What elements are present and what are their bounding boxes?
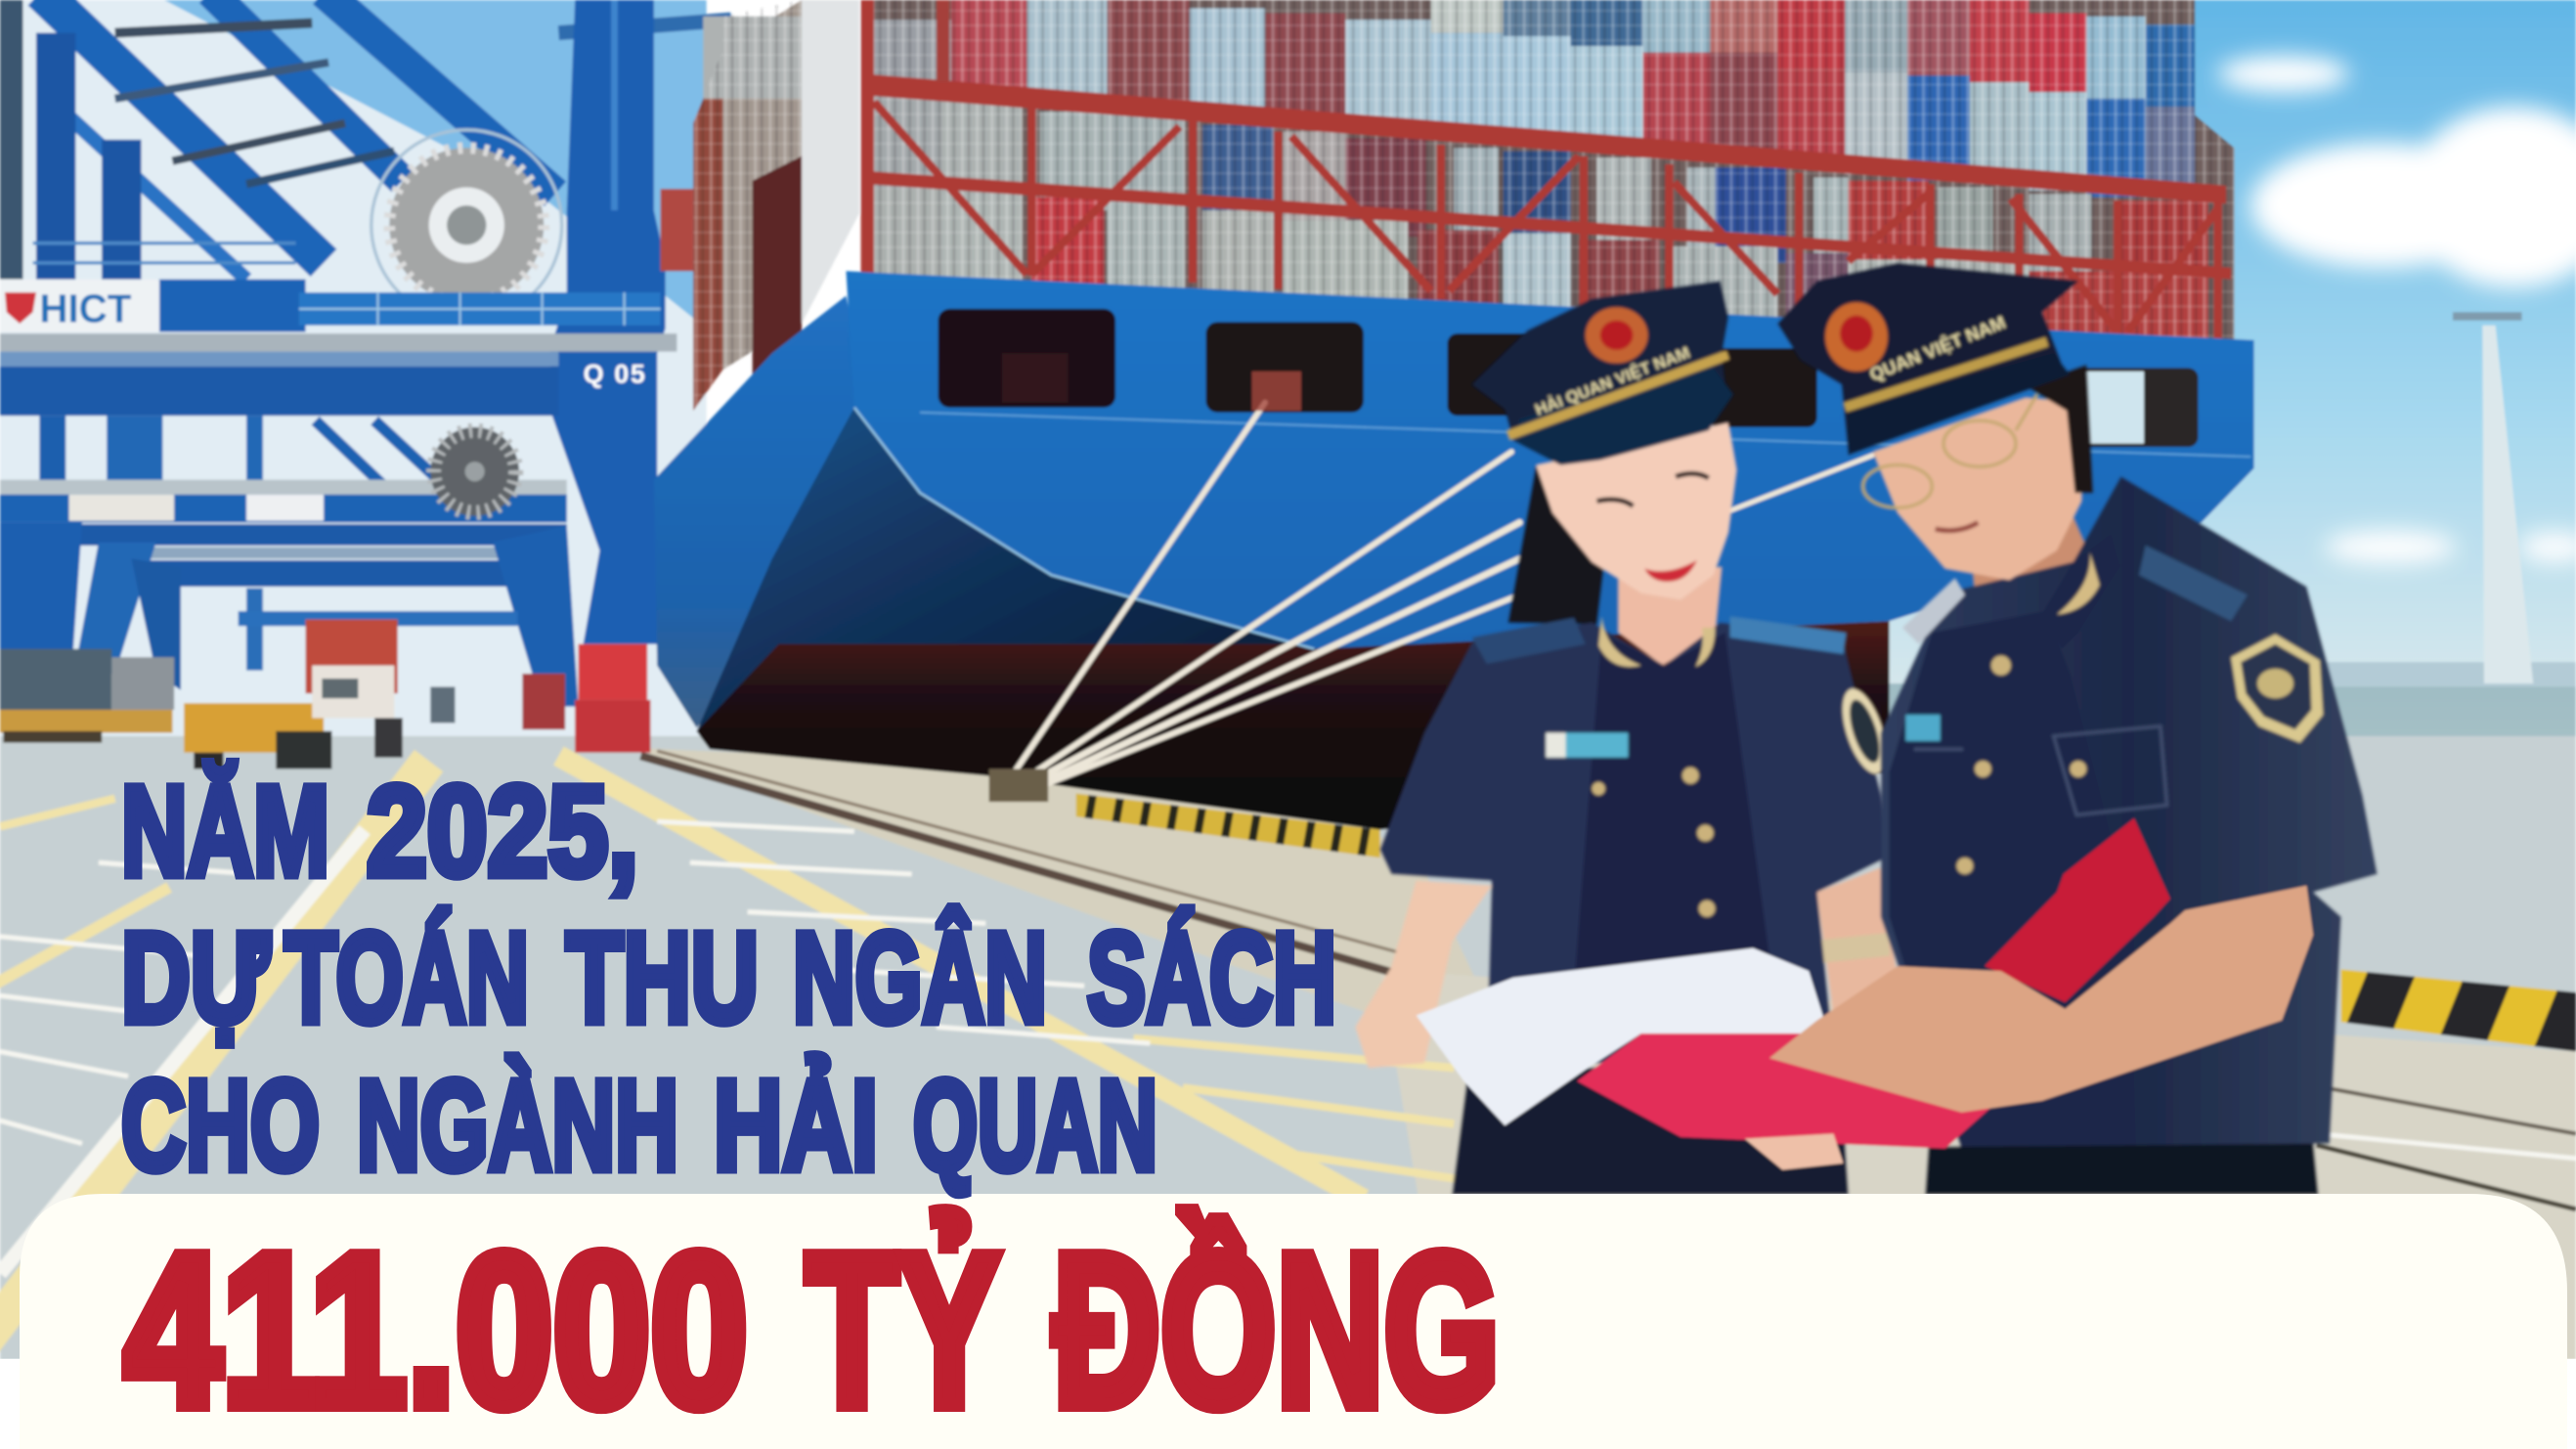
collar badge	[2057, 552, 2100, 615]
eyes and lips	[1596, 473, 1709, 582]
hair	[1508, 465, 1607, 625]
left sky behind cranes	[0, 0, 707, 748]
title line 2: DỰ	[121, 905, 270, 1049]
yellow and black quay bumper, far	[1076, 794, 1380, 857]
ship hull, red and black waterline	[697, 621, 1890, 830]
sleeve emblem	[1834, 683, 1896, 779]
main container stacks on deck	[861, 0, 2234, 353]
lower tier containers	[874, 189, 2208, 353]
ship hull, dark blue curved band	[697, 408, 1314, 731]
red steel lashing frame	[861, 0, 2231, 348]
title line 3: QUAN	[913, 1053, 1157, 1197]
crane cross beam	[0, 367, 558, 416]
main crane leg	[550, 0, 666, 644]
mooring ropes and bollard	[989, 372, 1873, 802]
cable reel, upper	[371, 130, 562, 321]
name tag and buttons	[1905, 715, 1941, 741]
neck	[1972, 509, 2095, 649]
red straddle machine	[522, 644, 650, 753]
crane platform with HICT sign: HICT	[39, 285, 132, 330]
top tier containers	[874, 0, 2195, 198]
ground and road markings	[0, 736, 2576, 1364]
panel: cream headline band	[20, 1194, 2567, 1449]
cap	[1777, 263, 2078, 452]
ship side container stacks	[661, 0, 859, 411]
cap badge	[1586, 307, 1648, 363]
skirt	[1453, 1068, 1849, 1195]
right forearm	[1817, 867, 1898, 1027]
ship bow, blue side face	[654, 295, 871, 727]
title line 2: SÁCH	[1087, 905, 1336, 1049]
title line 3: HẢI	[714, 1053, 878, 1197]
face	[1873, 398, 2081, 580]
woman's lower hand	[1745, 1134, 1844, 1170]
man's forearm and hand	[1769, 886, 2313, 1113]
mouth	[1936, 522, 1978, 531]
crane platform with HICT sign	[0, 280, 677, 367]
headline figure: budget amount: ĐỒNG	[1053, 1208, 1500, 1449]
title line 1: 2025,	[367, 759, 638, 902]
cap	[1472, 281, 1728, 465]
crane diagonal beams	[0, 0, 731, 287]
cap band	[1845, 342, 2047, 408]
title line 2: THU	[566, 905, 759, 1049]
left arm	[1355, 881, 1492, 1068]
headline figure: budget amount	[124, 1208, 1500, 1449]
shoulder boards	[1730, 616, 1847, 654]
belt	[1926, 1144, 2318, 1195]
collar	[2044, 534, 2119, 649]
headline figure: budget amount: TỶ	[806, 1209, 1000, 1449]
uniform shirt	[1881, 476, 2378, 1149]
cap band	[1508, 355, 1728, 435]
ship hull, blue upper	[846, 271, 2254, 649]
title line 2: NGÂN	[793, 905, 1047, 1049]
collar badges	[1598, 616, 1715, 667]
cable car tower	[2453, 312, 2533, 683]
hull windows	[939, 309, 2199, 447]
sky and water backdrop	[1887, 0, 2576, 737]
title line 3	[121, 1053, 1157, 1197]
red folder, back page	[1985, 818, 2170, 1002]
red container truck	[306, 620, 403, 758]
title line 3: CHO	[121, 1053, 320, 1197]
quay cranes	[0, 0, 731, 768]
headline figure: budget amount: 411.000	[124, 1209, 748, 1449]
yellow terminal vehicles	[0, 703, 331, 768]
middle tier containers	[874, 95, 2208, 290]
officer: woman	[1355, 281, 1898, 1195]
title line 1	[121, 759, 638, 902]
heading: three blue title lines	[121, 759, 1336, 1197]
face	[1536, 422, 1736, 599]
cap lettering: HẢI QUAN VIỆT NAM	[1533, 343, 1692, 419]
neck	[1618, 567, 1722, 666]
title line 2: TOÁN	[284, 905, 529, 1049]
red folder, front page	[1577, 1033, 1992, 1149]
cap badge	[1825, 302, 1888, 372]
title line 2	[121, 905, 1336, 1049]
glasses	[1863, 394, 2037, 507]
shoulder boards	[2139, 546, 2248, 621]
officer: man	[1777, 263, 2378, 1195]
title line 1: NĂM	[121, 759, 329, 902]
parked containers	[0, 649, 455, 723]
name tag and buttons	[1546, 733, 1628, 758]
cable reel, lower	[430, 427, 519, 516]
sleeve shield badge	[2231, 635, 2323, 743]
chest pocket flaps	[1914, 726, 2167, 815]
title line 3: NGÀNH	[357, 1053, 678, 1197]
lower crane structure	[0, 416, 579, 710]
cap lettering: QUAN VIỆT NAM	[1866, 312, 2008, 385]
uniform shirt	[1380, 623, 1890, 1068]
yellow and black quay bumper, near	[2341, 969, 2576, 1052]
white document sheets	[1417, 948, 1828, 1125]
crane number label: Q 05	[584, 360, 647, 389]
hair	[2026, 365, 2093, 493]
